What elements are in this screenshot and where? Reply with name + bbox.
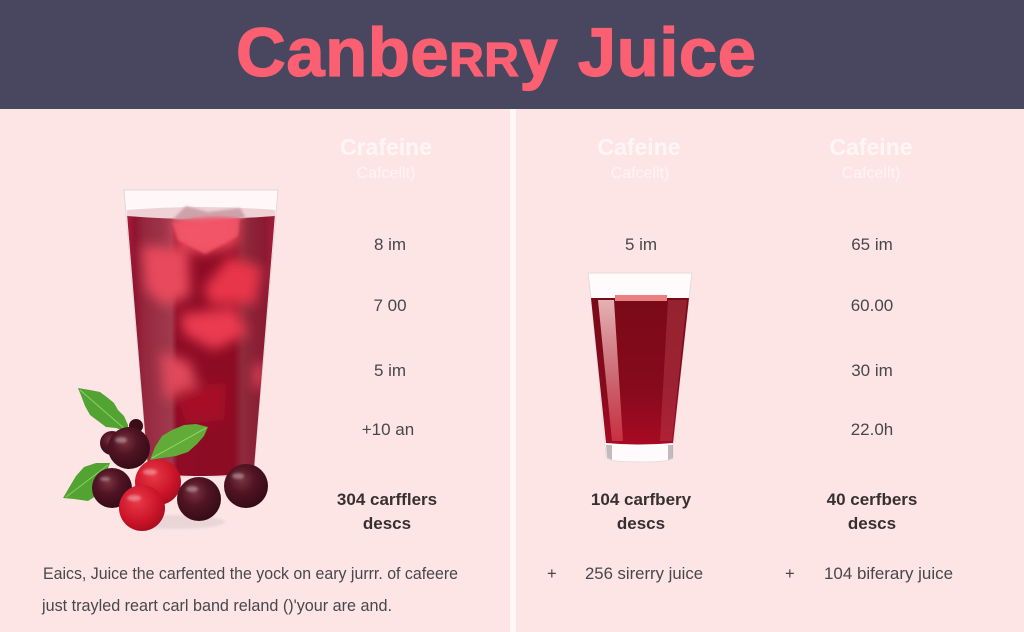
footnote text: Eaics, Juice the carfented the yock on eary jurrr. of cafeere (43, 565, 458, 583)
column 3 values: 60.00 (851, 296, 893, 315)
column 3 values: 30 im (851, 361, 893, 380)
ice cubes (142, 214, 264, 424)
footnote text: just trayled reart carl band reland ()'your are and. (41, 597, 392, 615)
footnote text (41, 565, 458, 615)
column 2 footnote: 256 sirerry juice (585, 565, 703, 583)
column 1 values (362, 235, 414, 439)
column 2 summary: descs (617, 514, 665, 533)
leaf top (78, 388, 128, 432)
column 1 summary: 304 carfflers (337, 490, 437, 509)
column 3 footnote: 104 biferary juice (824, 565, 953, 583)
column divider (510, 109, 516, 632)
column 1 summary: descs (363, 514, 411, 533)
column 1 heading (340, 134, 432, 182)
icon: tall glass with iced juice (124, 190, 278, 477)
column 3 heading: Cafcellt) (842, 165, 900, 182)
column 2 summary: 104 carfbery (591, 490, 692, 509)
icon: cranberries and leaves (63, 388, 268, 531)
column 1 values: 5 im (374, 361, 406, 380)
column 3 summary: descs (848, 514, 896, 533)
column 1 heading: Cafcellt) (357, 165, 415, 182)
column 3 values (851, 235, 893, 439)
column 3 summary: 40 cerfbers (827, 490, 917, 509)
header banner (0, 0, 1024, 109)
panel: right column (547, 134, 953, 583)
title: Canberry Juice (236, 14, 756, 91)
column 2 summary (591, 490, 692, 533)
column 3 heading: Cafeine (829, 134, 913, 160)
leaf right (150, 424, 208, 460)
leaf left (63, 463, 110, 501)
column 3 values: 65 im (851, 235, 893, 254)
column 1 values: 8 im (374, 235, 406, 254)
column 2 footnote: + (547, 565, 557, 583)
column 2 values: 5 im (625, 235, 657, 254)
column 3 values: 22.0h (851, 420, 893, 439)
column 2 heading: Cafeine (597, 134, 681, 160)
column 1 summary (337, 490, 437, 533)
panel: left column (41, 134, 458, 615)
berry highlights (100, 437, 244, 501)
column 3 footnote: + (785, 565, 795, 583)
column 2 heading (597, 134, 681, 182)
icon: short glass of juice (588, 273, 692, 462)
column 1 heading: Crafeine (340, 134, 432, 160)
column 3 summary (827, 490, 917, 533)
column 1 values: 7 00 (373, 296, 407, 315)
column 2 heading: Cafcellt) (611, 165, 669, 182)
column 1 values: +10 an (362, 420, 414, 439)
column 3 heading (829, 134, 913, 182)
